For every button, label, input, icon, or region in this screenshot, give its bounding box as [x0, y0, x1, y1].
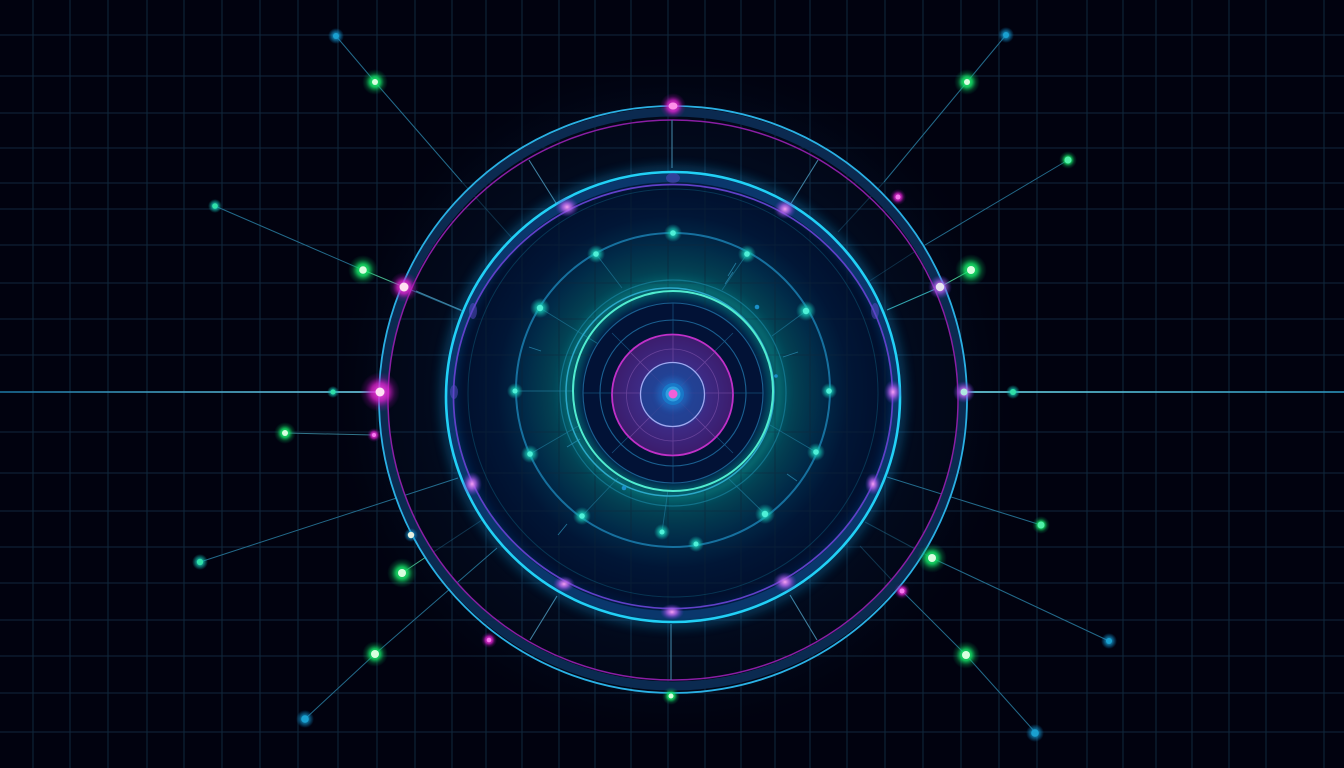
interior grid — [458, 182, 888, 605]
white nodes on outer ring — [404, 275, 975, 542]
horizontal axis beams — [0, 391, 1344, 393]
outer ring band — [379, 106, 967, 693]
bright green nodes — [274, 69, 1077, 705]
inner filled field — [447, 173, 899, 621]
small teal-green nodes — [192, 199, 1020, 570]
small magenta nodes — [367, 189, 910, 648]
main cyan ring — [446, 172, 900, 622]
teal ring nodes — [507, 224, 837, 552]
inner faint spokes — [515, 254, 816, 535]
left magenta-white nodes — [360, 272, 419, 412]
green ring group — [560, 280, 786, 506]
spokes between outer and cyan rings — [416, 120, 818, 680]
cyan ring glow — [446, 172, 900, 622]
faint outer cyan rings — [560, 280, 786, 506]
inner dark circle rings — [583, 303, 763, 483]
purple ring — [454, 184, 892, 608]
pink blobs on cyan ring — [450, 173, 902, 620]
magenta disc — [612, 334, 733, 456]
outer connector lines — [200, 35, 1109, 732]
disc sub rings and spokes — [612, 335, 733, 455]
top magenta node — [660, 93, 686, 119]
cyan to purple band — [450, 178, 896, 615]
dotted ring — [516, 233, 830, 547]
outer magenta ring — [388, 120, 958, 680]
ambient glow — [323, 45, 1023, 745]
outer cyan ring — [379, 106, 967, 693]
white core ring — [640, 362, 704, 426]
green ring glow — [570, 288, 776, 494]
blue endpoint nodes — [296, 27, 1117, 742]
thin teal ring — [468, 189, 878, 597]
center node — [657, 378, 689, 410]
green ring — [573, 291, 773, 491]
